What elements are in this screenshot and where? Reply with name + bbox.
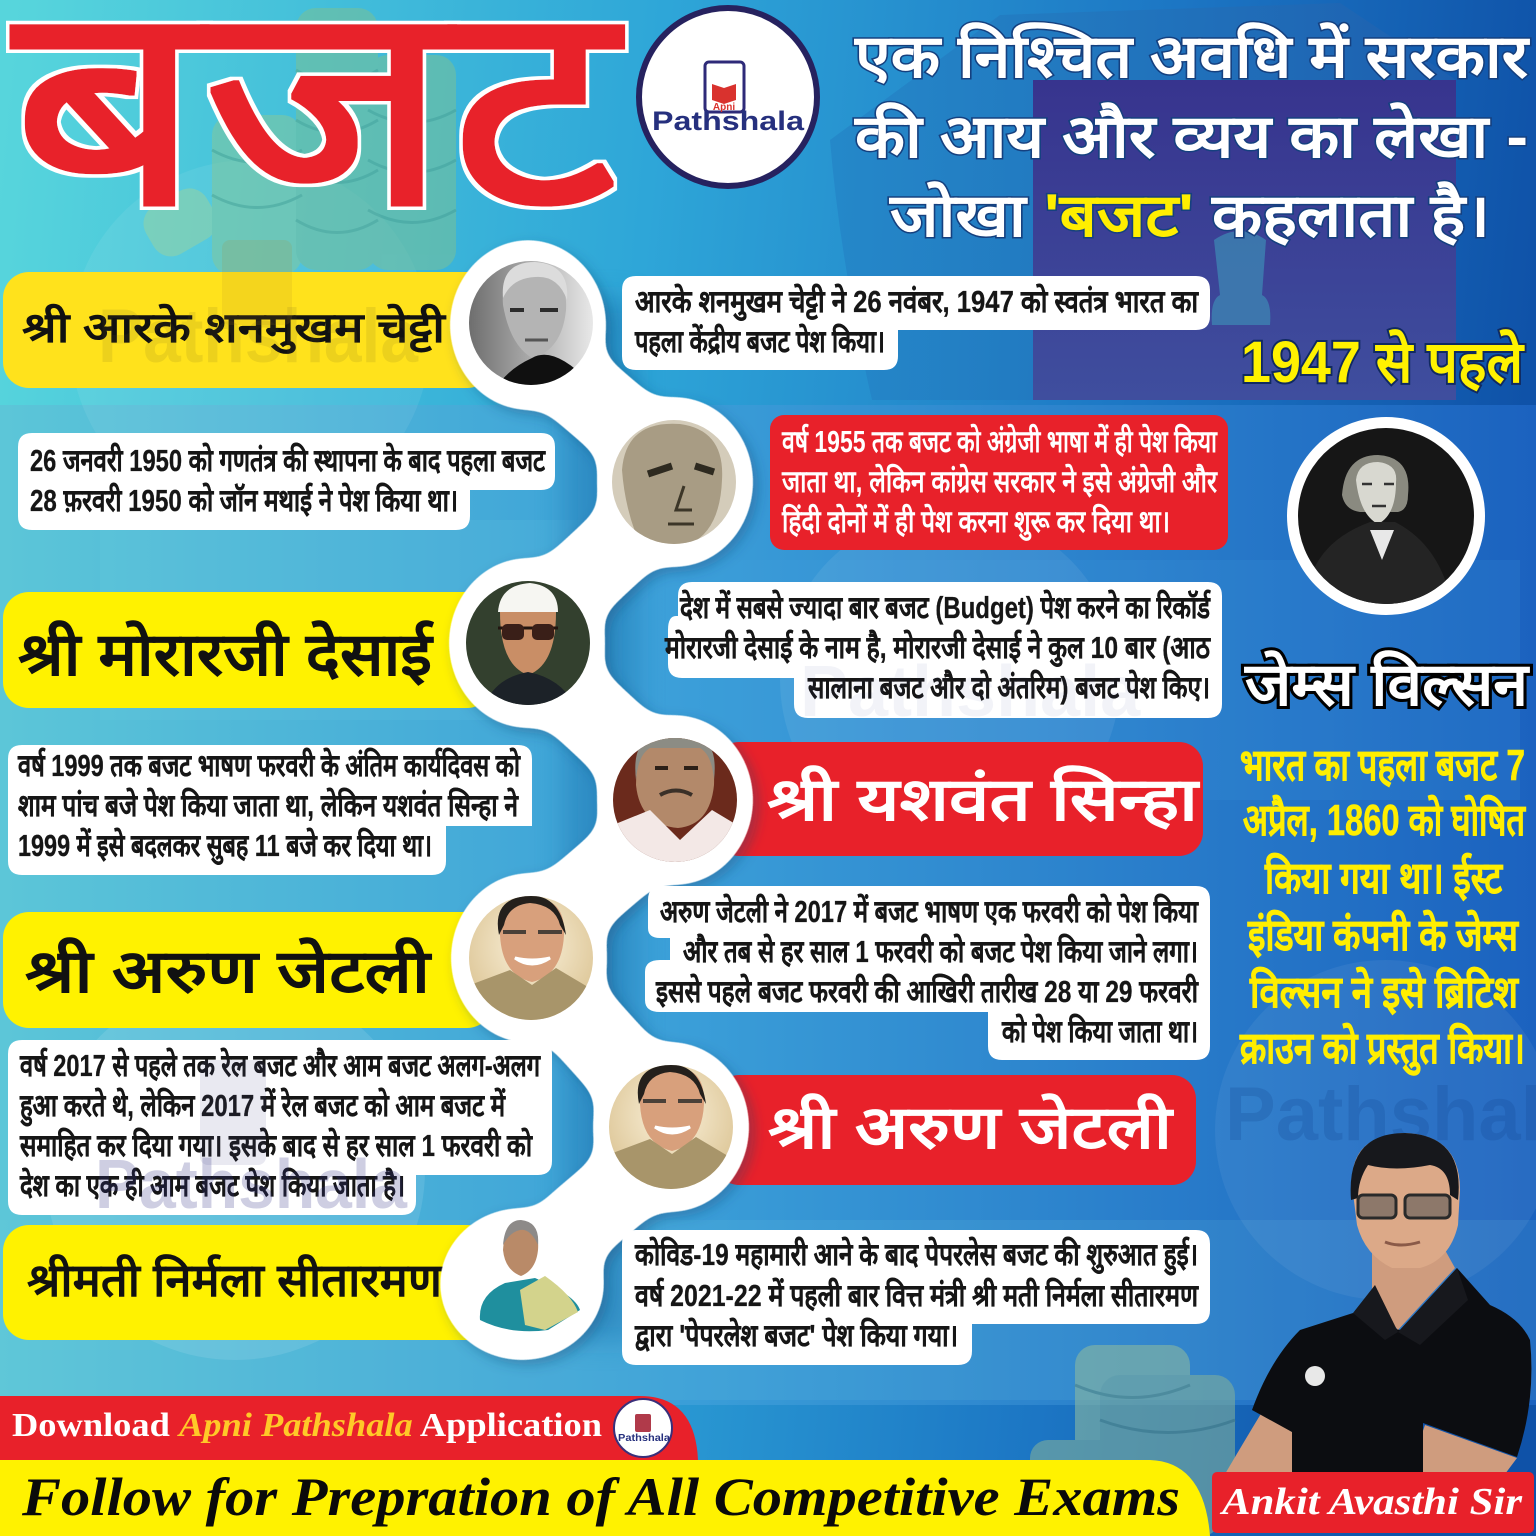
row 1: name panel [3, 272, 493, 388]
portrait: Arun Jaitley 2 [609, 1065, 733, 1189]
row 6: text block: वर्ष 2017 से पहले तक रेल बजट और आम बजट अलग-अलग [19, 1047, 541, 1083]
row 3: text block: सालाना बजट और दो अंतरिम) बजट पेश किए। [807, 669, 1210, 705]
row 2: text block: 26 जनवरी 1950 को गणतंत्र की स्थापना के बाद पहला बजट [30, 442, 546, 478]
row 5: text block: और तब से हर साल 1 फरवरी को बजट पेश किया जाने लगा। [683, 933, 1198, 969]
row 2: red text block: वर्ष 1955 तक बजट को अंग्रेजी भाषा में ही पेश किया [781, 423, 1218, 459]
row 7: text block: द्वारा 'पेपरलेश बजट' पेश किया गया। [634, 1317, 958, 1353]
row 5: text block: इससे पहले बजट फरवरी की आखिरी तारीख 28 या 29 फरवरी [655, 973, 1199, 1009]
row 5: text block [645, 886, 1210, 1060]
row 4: text block: शाम पांच बजे पेश किया जाता था, लेकिन यशवंत सिन्हा ने [18, 787, 519, 823]
row 6: text block [8, 1040, 552, 1215]
row 4: name panel: श्री यशवंत सिन्हा [767, 765, 1201, 833]
row 2: red text block: जाता था, लेकिन कांग्रेस सरकार ने इसे अंग्रेजी और [781, 463, 1218, 499]
row 7: name panel: श्रीमती निर्मला सीतारमण [27, 1254, 444, 1306]
heading: definition: जोखा 'बजट' कहलाता है। [889, 181, 1490, 249]
row 6: name panel: श्री अरुण जेटली [768, 1093, 1175, 1161]
logo: Apni Pathshala [639, 8, 817, 186]
icon: mini logo [614, 1399, 672, 1457]
row 1: name panel: श्री आरके शनमुखम चेट्टी [22, 303, 447, 354]
heading: definition: एक निश्चित अवधि में सरकार [854, 22, 1531, 90]
row 6: text block: समाहित कर दिया गया। इसके बाद से हर साल 1 फरवरी को [19, 1127, 533, 1163]
icon: national emblem [1212, 231, 1270, 325]
row 5: name panel: श्री अरुण जेटली [25, 937, 433, 1005]
row 2: text block [18, 433, 555, 530]
portrait: Morarji Desai [466, 581, 590, 705]
row 3: name panel [3, 592, 493, 708]
banner: follow [0, 1460, 1210, 1536]
banner: follow: Follow for Prepration of All Competitive Exams [21, 1467, 1180, 1527]
logo: Apni Pathshala: Pathshala [652, 106, 805, 136]
row 7: name panel [3, 1225, 493, 1340]
coins: bottom [1030, 1345, 1235, 1536]
heading: definition [854, 22, 1531, 249]
briefcase [830, 3, 1456, 400]
label: Ankit Avasthi Sir [1212, 1472, 1534, 1533]
row 6: text block: हुआ करते थे, लेकिन 2017 में रेल बजट को आम बजट में [19, 1087, 506, 1127]
watermarks over panels: Pathshala [98, 294, 419, 379]
row 3: text block: मोरारजी देसाई के नाम है, मोरारजी देसाई ने कुल 10 बार (आठ [664, 629, 1212, 667]
row 7: text block: वर्ष 2021-22 में पहली बार वित्त मंत्री श्री मती निर्मला सीतारमण [634, 1277, 1199, 1313]
watermarks over panels: Pathshala [800, 652, 1141, 732]
label: before 1947: 1947 से पहले [1241, 329, 1525, 395]
row 1: text block: पहला केंद्रीय बजट पेश किया। [634, 323, 885, 359]
watermarks over panels: Pathshala [95, 1145, 408, 1223]
row 2: red text block [770, 415, 1228, 550]
row 6: name panel [715, 1075, 1196, 1185]
watermarks over panels [95, 240, 1141, 1223]
row 5: name panel [3, 912, 493, 1028]
row 3: text block: देश में सबसे ज्यादा बार बजट (Budget) पेश करने का रिकॉर्ड [679, 589, 1211, 625]
portrait: Nirmala Sitharaman [480, 1220, 580, 1331]
portrait: Arun Jaitley [469, 896, 593, 1020]
heading: definition: की आय और व्यय का लेखा - [854, 102, 1528, 170]
row 7: text block [622, 1230, 1210, 1365]
row 1: text block: आरके शनमुखम चेट्टी ने 26 नवंबर, 1947 को स्वतंत्र भारत का [635, 283, 1199, 321]
row 2: text block: 28 फ़रवरी 1950 को जॉन मथाई ने पेश किया था। [30, 482, 458, 518]
icon: mini logo: Pathshala [618, 1433, 670, 1444]
name: James Wilson: जेम्स विल्सन [1244, 650, 1531, 718]
coins: top [136, 8, 456, 275]
portrait: James Wilson [1287, 417, 1485, 615]
row 5: text block: अरुण जेटली ने 2017 में बजट भाषण एक फरवरी को पेश किया [660, 893, 1199, 929]
portrait: Yashwant Sinha [613, 735, 737, 862]
logo: Apni Pathshala: Apni [713, 102, 735, 113]
portrait: Shanmukham Chetty [469, 261, 593, 385]
row 4: text block [8, 745, 532, 875]
row 4: text block: वर्ष 1999 तक बजट भाषण फरवरी के अंतिम कार्यदिवस को [17, 747, 521, 783]
row 4: name panel [715, 742, 1203, 856]
portrait: John Mathai [612, 420, 736, 544]
icon: phone [705, 62, 744, 112]
banner: download [0, 1396, 698, 1460]
label: Ankit Avasthi Sir: Ankit Avasthi Sir [1220, 1481, 1523, 1523]
text block: first budget [1239, 741, 1526, 1076]
row 7: text block: कोविड-19 महामारी आने के बाद पेपरलेस बजट की शुरुआत हुई। [634, 1236, 1198, 1276]
row 4: text block: 1999 में इसे बदलकर सुबह 11 बजे कर दिया था। [18, 827, 432, 865]
row 6: text block: देश का एक ही आम बजट पेश किया जाता है। [19, 1167, 405, 1203]
banner: download: Download Apni Pathshala Application [12, 1407, 602, 1444]
row 3: text block [664, 582, 1222, 718]
row 3: name panel: श्री मोरारजी देसाई [18, 620, 435, 688]
row 1: text block [622, 276, 1210, 370]
white connector ribbon [440, 240, 753, 1360]
presenter photo [1225, 1133, 1531, 1474]
row 2: red text block: हिंदी दोनों में ही पेश करना शुरू कर दिया था। [781, 503, 1170, 541]
row 5: text block: को पेश किया जाता था। [1001, 1013, 1198, 1049]
